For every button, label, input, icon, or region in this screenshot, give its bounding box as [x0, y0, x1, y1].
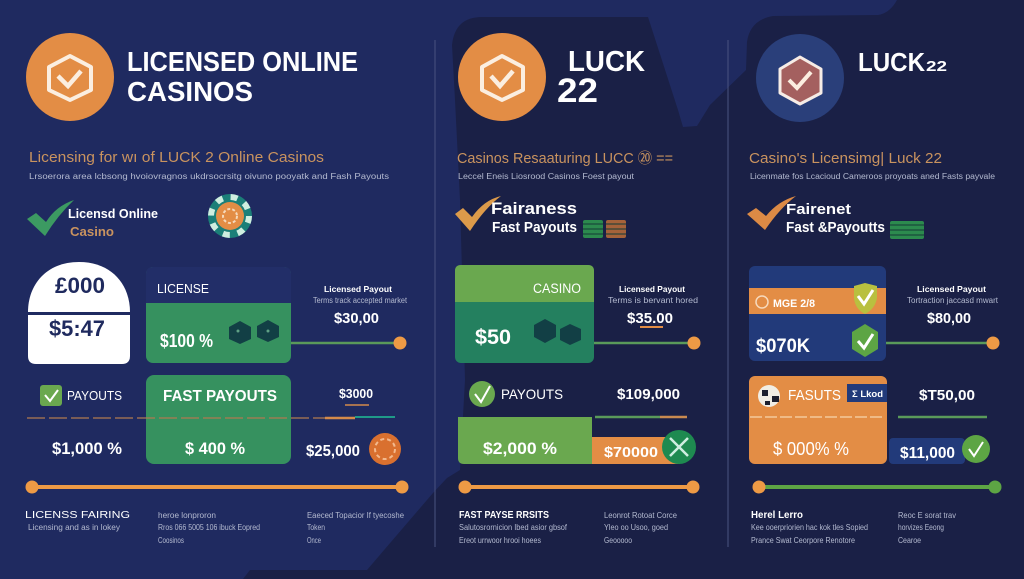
license card: $100 % [160, 331, 213, 351]
white price card [28, 262, 130, 364]
fast payouts card: $ 000% % [773, 439, 849, 459]
icon: chip stacks [583, 220, 626, 238]
panel: luck 22 [455, 33, 700, 545]
title [557, 46, 645, 110]
payouts row: PAYOUTS [501, 386, 563, 402]
payout stat: $35.00 [627, 310, 673, 327]
footer notes: Prance Swat Ceorpore Renotore [751, 536, 855, 545]
footer notes: horvizes Eeong [898, 523, 944, 532]
license card [146, 267, 291, 363]
footer notes: FAST PAYSE RRSITS [459, 510, 549, 521]
title: LUCK [568, 46, 645, 78]
footer notes: Herel Lerro [751, 510, 803, 521]
payouts row: FAST PAYOUTS [163, 388, 277, 405]
panel: licensed online casinos [25, 33, 408, 545]
licensed online label [68, 206, 158, 239]
footer notes: Ereot urrwoor hrooi hoees [459, 536, 541, 545]
fairness label: Fast Payouts [492, 220, 577, 236]
description: Leccel Eneis Liosrood Casinos Foest payout [458, 172, 635, 181]
payouts row: $25,000 [306, 443, 360, 460]
payout stat: Tortraction jaccasd mwart [907, 296, 999, 305]
description: Licenmate fos Lcacioud Cameroos proyoats aned Fasts payvale [750, 172, 996, 181]
slider [458, 480, 700, 494]
footer notes: LICENSS FAIRING [25, 510, 130, 521]
license card: $070K [756, 336, 810, 357]
payouts row: $3000 [339, 386, 373, 401]
payouts row: $2,000 % [483, 439, 557, 458]
casino card: $50 [475, 326, 511, 349]
white price card: $5:47 [49, 316, 105, 341]
payout stat: $30,00 [334, 310, 379, 327]
subtitle: Casino's Licensimg| Luck 22 [749, 150, 942, 167]
footer notes: Yleo oo Usoo, goed [604, 523, 668, 532]
payout stat: Terms track accepted market [313, 296, 408, 305]
footer notes [25, 510, 405, 545]
footer notes: Token [307, 523, 325, 532]
payouts row [458, 381, 696, 464]
footer notes: Leonrot Rotoat Corce [604, 511, 678, 520]
title [127, 46, 358, 107]
fast payouts card: Σ Lkod [852, 389, 883, 399]
fairness label: Fast &Payoutts [786, 220, 885, 236]
footer notes: Reoc E sorat trav [898, 511, 956, 520]
license card: LICENSE [157, 281, 209, 296]
payouts row: $ 400 % [185, 439, 245, 458]
fairness label [491, 199, 577, 236]
subtitle: Licensing for wı of LUCK 2 Online Casinos [29, 149, 324, 166]
fairness label: Fairaness [491, 199, 577, 218]
title: CASINOS [127, 76, 253, 107]
fairness label [786, 201, 885, 236]
payout stat: Licensed Payout [619, 284, 685, 294]
payout stat [886, 284, 1000, 350]
icon: chip stack [890, 221, 924, 239]
fairness label: Fairenet [786, 201, 851, 218]
title: LUCK [858, 47, 925, 77]
icon: casino chip [208, 194, 252, 238]
payouts stat: $T50,00 [919, 387, 975, 404]
icon: orange check [455, 196, 501, 231]
white price card: £000 [55, 273, 105, 298]
title: 22 [926, 58, 947, 75]
footer notes: Geooooo [604, 536, 632, 545]
icon: orange shield badge [26, 33, 114, 121]
casino card [455, 265, 594, 363]
casino card: CASINO [533, 281, 581, 296]
payout stat [291, 284, 408, 350]
footer notes: Salutosrornicion Ibed asior gbsof [459, 523, 568, 532]
slider [752, 480, 1002, 494]
description: Lrsoerora area lcbsong hvoiovragnos ukdrsocrsitg oivuno pooyatk and Fash Payouts [29, 172, 389, 181]
payout stat: Licensed Payout [324, 284, 392, 294]
footer notes: Licensing and as in lokey [28, 523, 120, 532]
footer notes: Rros 066 5005 106 ibuck Eopred [158, 523, 260, 532]
footer notes [751, 510, 956, 545]
licensed online label: Casino [70, 224, 114, 239]
footer notes: Coosinos [158, 536, 184, 545]
panel: casino's licensing luck 22 [747, 34, 1002, 545]
payouts row: $109,000 [617, 386, 680, 403]
icon: orange shield badge [458, 33, 546, 121]
subtitle: Casinos Resaaturing LUCC ⑳ == [457, 150, 673, 167]
payout stat: $80,00 [927, 310, 971, 327]
footer notes: heroe lonproron [158, 511, 216, 520]
license card: MGE 2/8 [773, 298, 815, 310]
fast payouts card: FASUTS [788, 387, 841, 404]
title: 22 [557, 72, 598, 110]
payout stat: Licensed Payout [917, 284, 986, 294]
payouts row: PAYOUTS [67, 389, 122, 403]
footer notes: Once [307, 536, 321, 545]
title: LICENSED ONLINE [127, 46, 358, 77]
license card [749, 266, 886, 361]
payout stat [594, 284, 700, 350]
payouts row: $70000 [604, 444, 658, 461]
footer notes: Eaeced Topacior If tyecoshe [307, 511, 405, 520]
footer notes: Kee ooerpriorien hac kok tles Sopied [751, 523, 868, 532]
icon: orange check [747, 196, 796, 230]
payouts row: $1,000 % [52, 439, 122, 458]
icon: navy shield badge [756, 34, 844, 122]
slider [26, 480, 408, 494]
payouts stat [889, 387, 990, 464]
payouts stat: $11,000 [900, 445, 955, 462]
payouts row [27, 375, 401, 465]
footer notes: Cearoe [898, 536, 921, 545]
licensed online label: Licensd Online [68, 206, 158, 221]
fast payouts card [749, 376, 887, 464]
icon: green check [27, 200, 74, 236]
footer notes [459, 510, 678, 545]
payout stat: Terms is bervant hored [608, 296, 698, 305]
